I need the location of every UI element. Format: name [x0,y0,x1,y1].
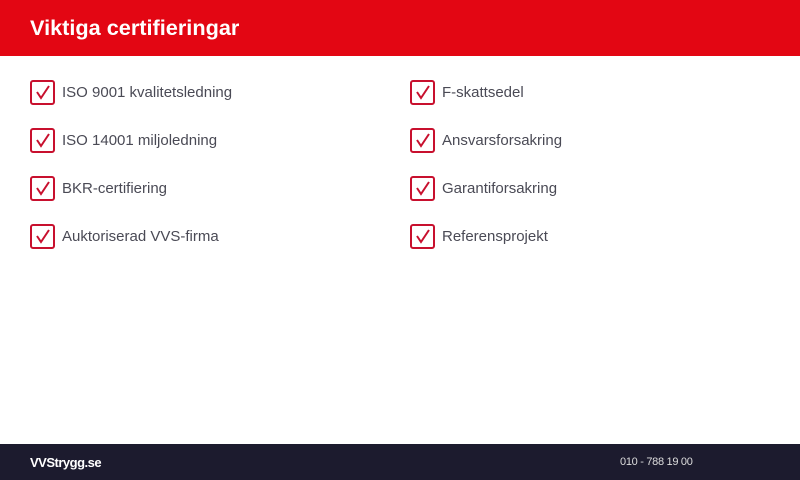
item: Garantiforsakring [410,176,557,201]
item: F-skattsedel [410,80,524,105]
footer brand: VVStrygg.se [30,455,101,470]
item: ISO 14001: ISO 14001 miljoledning [62,132,217,148]
item: ISO 9001: ISO 9001 kvalitetsledning [62,84,232,100]
item: Ansvarsforsakring: Ansvarsforsakring [442,132,562,148]
footer [0,444,800,480]
header [0,0,800,56]
item: Referensprojekt [410,224,548,249]
item: F-skattsedel: F-skattsedel [442,84,524,100]
footer phone: 010 - 788 19 00 [620,456,693,468]
item: Garantiforsakring: Garantiforsakring [442,180,557,196]
item: Auktoriserad: Auktoriserad VVS-firma [62,228,219,244]
title: Viktiga certifieringar [30,15,239,40]
item: Auktoriserad [30,224,219,249]
item: BKR: BKR-certifiering [62,180,167,196]
item: Referensprojekt: Referensprojekt [442,228,548,244]
item: BKR [30,176,167,201]
item: ISO 9001 [30,80,232,105]
item: ISO 14001 [30,128,217,153]
item: Ansvarsforsakring [410,128,562,153]
